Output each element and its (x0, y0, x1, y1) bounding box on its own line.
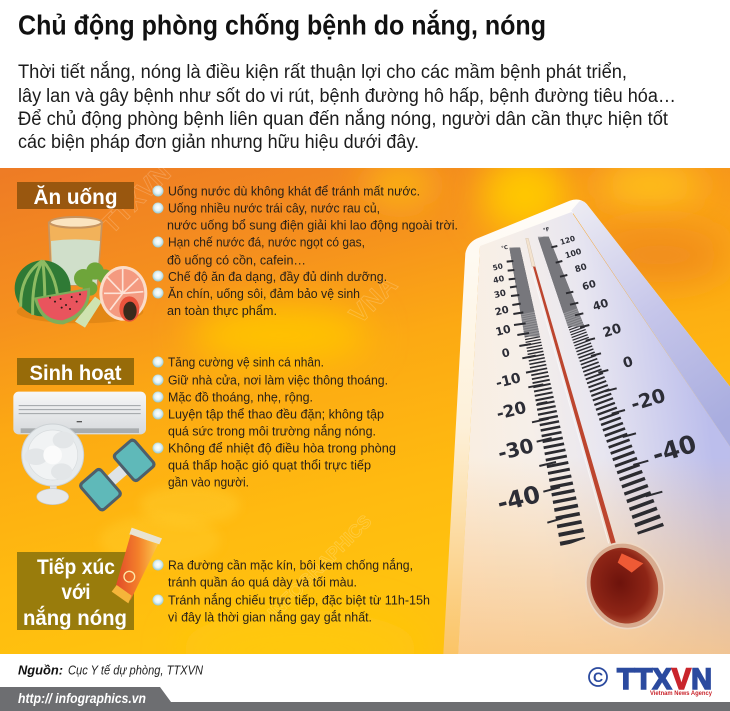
text: Sinh hoạt advice (152, 354, 396, 490)
text: Ăn uống advice: Uống nhiều nước trái cây, nước rau củ, (168, 200, 380, 216)
panel: Ăn uống (15, 182, 458, 328)
heading: Sinh hoạt: Sinh hoạt (30, 361, 122, 385)
text: Sinh hoạt advice: Giữ nhà cửa, nơi làm việc thông thoáng. (168, 372, 388, 388)
intro paragraph: Để chủ động phòng bệnh liên quan đến nắng nóng, người dân cần thực hiện tốt (18, 108, 669, 130)
celsius labels: -30 (495, 433, 536, 465)
footer bar: http:// infographics.vn (18, 690, 146, 706)
heading: Ăn uống: Ăn uống (34, 184, 118, 209)
celsius labels: 40 (492, 274, 506, 285)
source note: Cục Y tế dự phòng, TTXVN (68, 662, 204, 678)
text: Sinh hoạt advice: quá sức trong môi trường nắng nóng. (168, 424, 376, 438)
intro paragraph: lây lan và gây bệnh như sốt do vi rút, bệnh đường hô hấp, bệnh đường tiêu hóa… (18, 86, 676, 107)
celsius labels: 0 (500, 345, 511, 361)
text: Tiếp xúc advice: Tránh nắng chiếu trực tiếp, đặc biệt từ 11h-15h (168, 592, 430, 608)
celsius labels: -40 (494, 480, 543, 518)
logo: TTXVN: TTXVN (617, 663, 712, 696)
fahrenheit labels: -20 (628, 384, 668, 416)
fahrenheit labels: 60 (581, 279, 598, 293)
panel: Tiếp xúc với nắng nóng (17, 528, 430, 630)
text: Tiếp xúc advice: tránh quần áo quá dày và tối màu. (168, 574, 357, 590)
intro paragraph: Thời tiết nắng, nóng là điều kiện rất thuận lợi cho các mầm bệnh phát triển, (18, 61, 627, 83)
thermometer face (458, 212, 730, 654)
intro paragraph (18, 61, 676, 153)
logo: TTXVN: C (593, 669, 603, 685)
celsius scale ticks (507, 245, 573, 543)
text: Ăn uống advice (152, 184, 458, 318)
text: Tiếp xúc advice: Ra đường cần mặc kín, bôi kem chống nắng, (168, 558, 413, 572)
celsius labels (492, 245, 543, 518)
title: Chủ động phòng chống bệnh do nắng, nóng (18, 10, 546, 40)
heading: Tiếp xúc với nắng nóng: nắng nóng (23, 605, 127, 630)
celsius long ticks (507, 261, 562, 523)
heading: Ăn uống (17, 182, 134, 209)
celsius labels: 20 (494, 305, 510, 319)
watermarks: VNA (343, 269, 403, 329)
celsius labels: °C (501, 245, 509, 252)
text: Ăn uống advice: Chế độ ăn đa dạng, đầy đủ dinh dưỡng. (168, 269, 387, 284)
text: Sinh hoạt advice: quá thấp hoặc gió quạt thổi trực tiếp (168, 458, 371, 472)
watermarks: INFOGRAPHICS (264, 511, 375, 623)
text: Sinh hoạt advice: Luyện tập thể thao đều đặn; không tập (168, 406, 384, 422)
fahrenheit labels: 0 (621, 354, 635, 372)
fahrenheit labels: 80 (574, 262, 588, 275)
celsius labels: 30 (493, 288, 507, 301)
heading: Tiếp xúc với nắng nóng: với (62, 580, 90, 604)
watermarks: TTXVN (68, 543, 150, 624)
text: Sinh hoạt advice: Tăng cường vệ sinh cá nhân. (168, 354, 324, 370)
icon: food and drink (15, 217, 147, 328)
panel: sunny background (0, 155, 730, 690)
text: Sinh hoạt advice: Không để nhiệt độ điều hòa trong phòng (168, 440, 396, 456)
text: Tiếp xúc advice (152, 558, 430, 624)
heading: Tiếp xúc với nắng nóng (17, 552, 134, 630)
text: Ăn uống advice: Uống nước dù không khát để tránh mất nước. (168, 184, 420, 198)
watermarks: TTXVN (95, 158, 177, 239)
text: Ăn uống advice: nước uống bổ sung điện giải khi lao động ngoài trời. (167, 218, 458, 232)
source note (18, 662, 204, 678)
source note: Nguồn: (18, 662, 63, 678)
text: Sinh hoạt advice: gần vào người. (168, 474, 249, 490)
celsius labels: -10 (494, 370, 523, 392)
fahrenheit labels: 40 (591, 295, 610, 314)
text: Ăn uống advice: Ăn chín, uống sôi, đảm bảo vệ sinh (168, 286, 360, 301)
text: Ăn uống advice: an toàn thực phẩm. (167, 303, 277, 318)
thermometer (443, 200, 730, 654)
fahrenheit labels (543, 227, 700, 470)
mercury column (526, 238, 617, 547)
icon: sunscreen tube (112, 528, 162, 603)
fahrenheit labels: 120 (559, 234, 576, 247)
intro paragraph: các biện pháp đơn giản nhưng hữu hiệu dưới đây. (18, 132, 419, 153)
celsius labels: 50 (492, 261, 504, 273)
heading: Tiếp xúc với nắng nóng: Tiếp xúc (37, 555, 115, 579)
panel: Sinh hoạt (13, 354, 396, 513)
watermarks (68, 158, 403, 624)
thermometer right rim (571, 201, 730, 447)
icon: air conditioner, fan, dumbbell (13, 392, 158, 513)
thermometer bulb (575, 533, 675, 639)
text: Sinh hoạt advice: Mặc đồ thoáng, nhẹ, rộng. (168, 390, 313, 404)
fahrenheit long ticks (551, 246, 662, 496)
thermometer body rim (443, 200, 730, 654)
text: Ăn uống advice: đồ uống có cồn, cafein… (167, 252, 306, 268)
text: Tiếp xúc advice: vì đây là thời gian nắng gay gắt nhất. (168, 610, 372, 624)
fahrenheit scale ticks (535, 233, 651, 531)
fahrenheit labels: °F (543, 227, 551, 234)
celsius labels: -20 (494, 398, 528, 424)
logo: TTXVN: Vietnam News Agency (650, 690, 712, 697)
text: Ăn uống advice: Hạn chế nước đá, nước ngọt có gas, (168, 234, 365, 250)
fahrenheit labels: 20 (601, 321, 623, 341)
fahrenheit labels: -40 (649, 429, 700, 470)
fahrenheit labels: 100 (564, 247, 583, 260)
footer bar (0, 687, 730, 711)
celsius labels: 10 (494, 322, 512, 339)
